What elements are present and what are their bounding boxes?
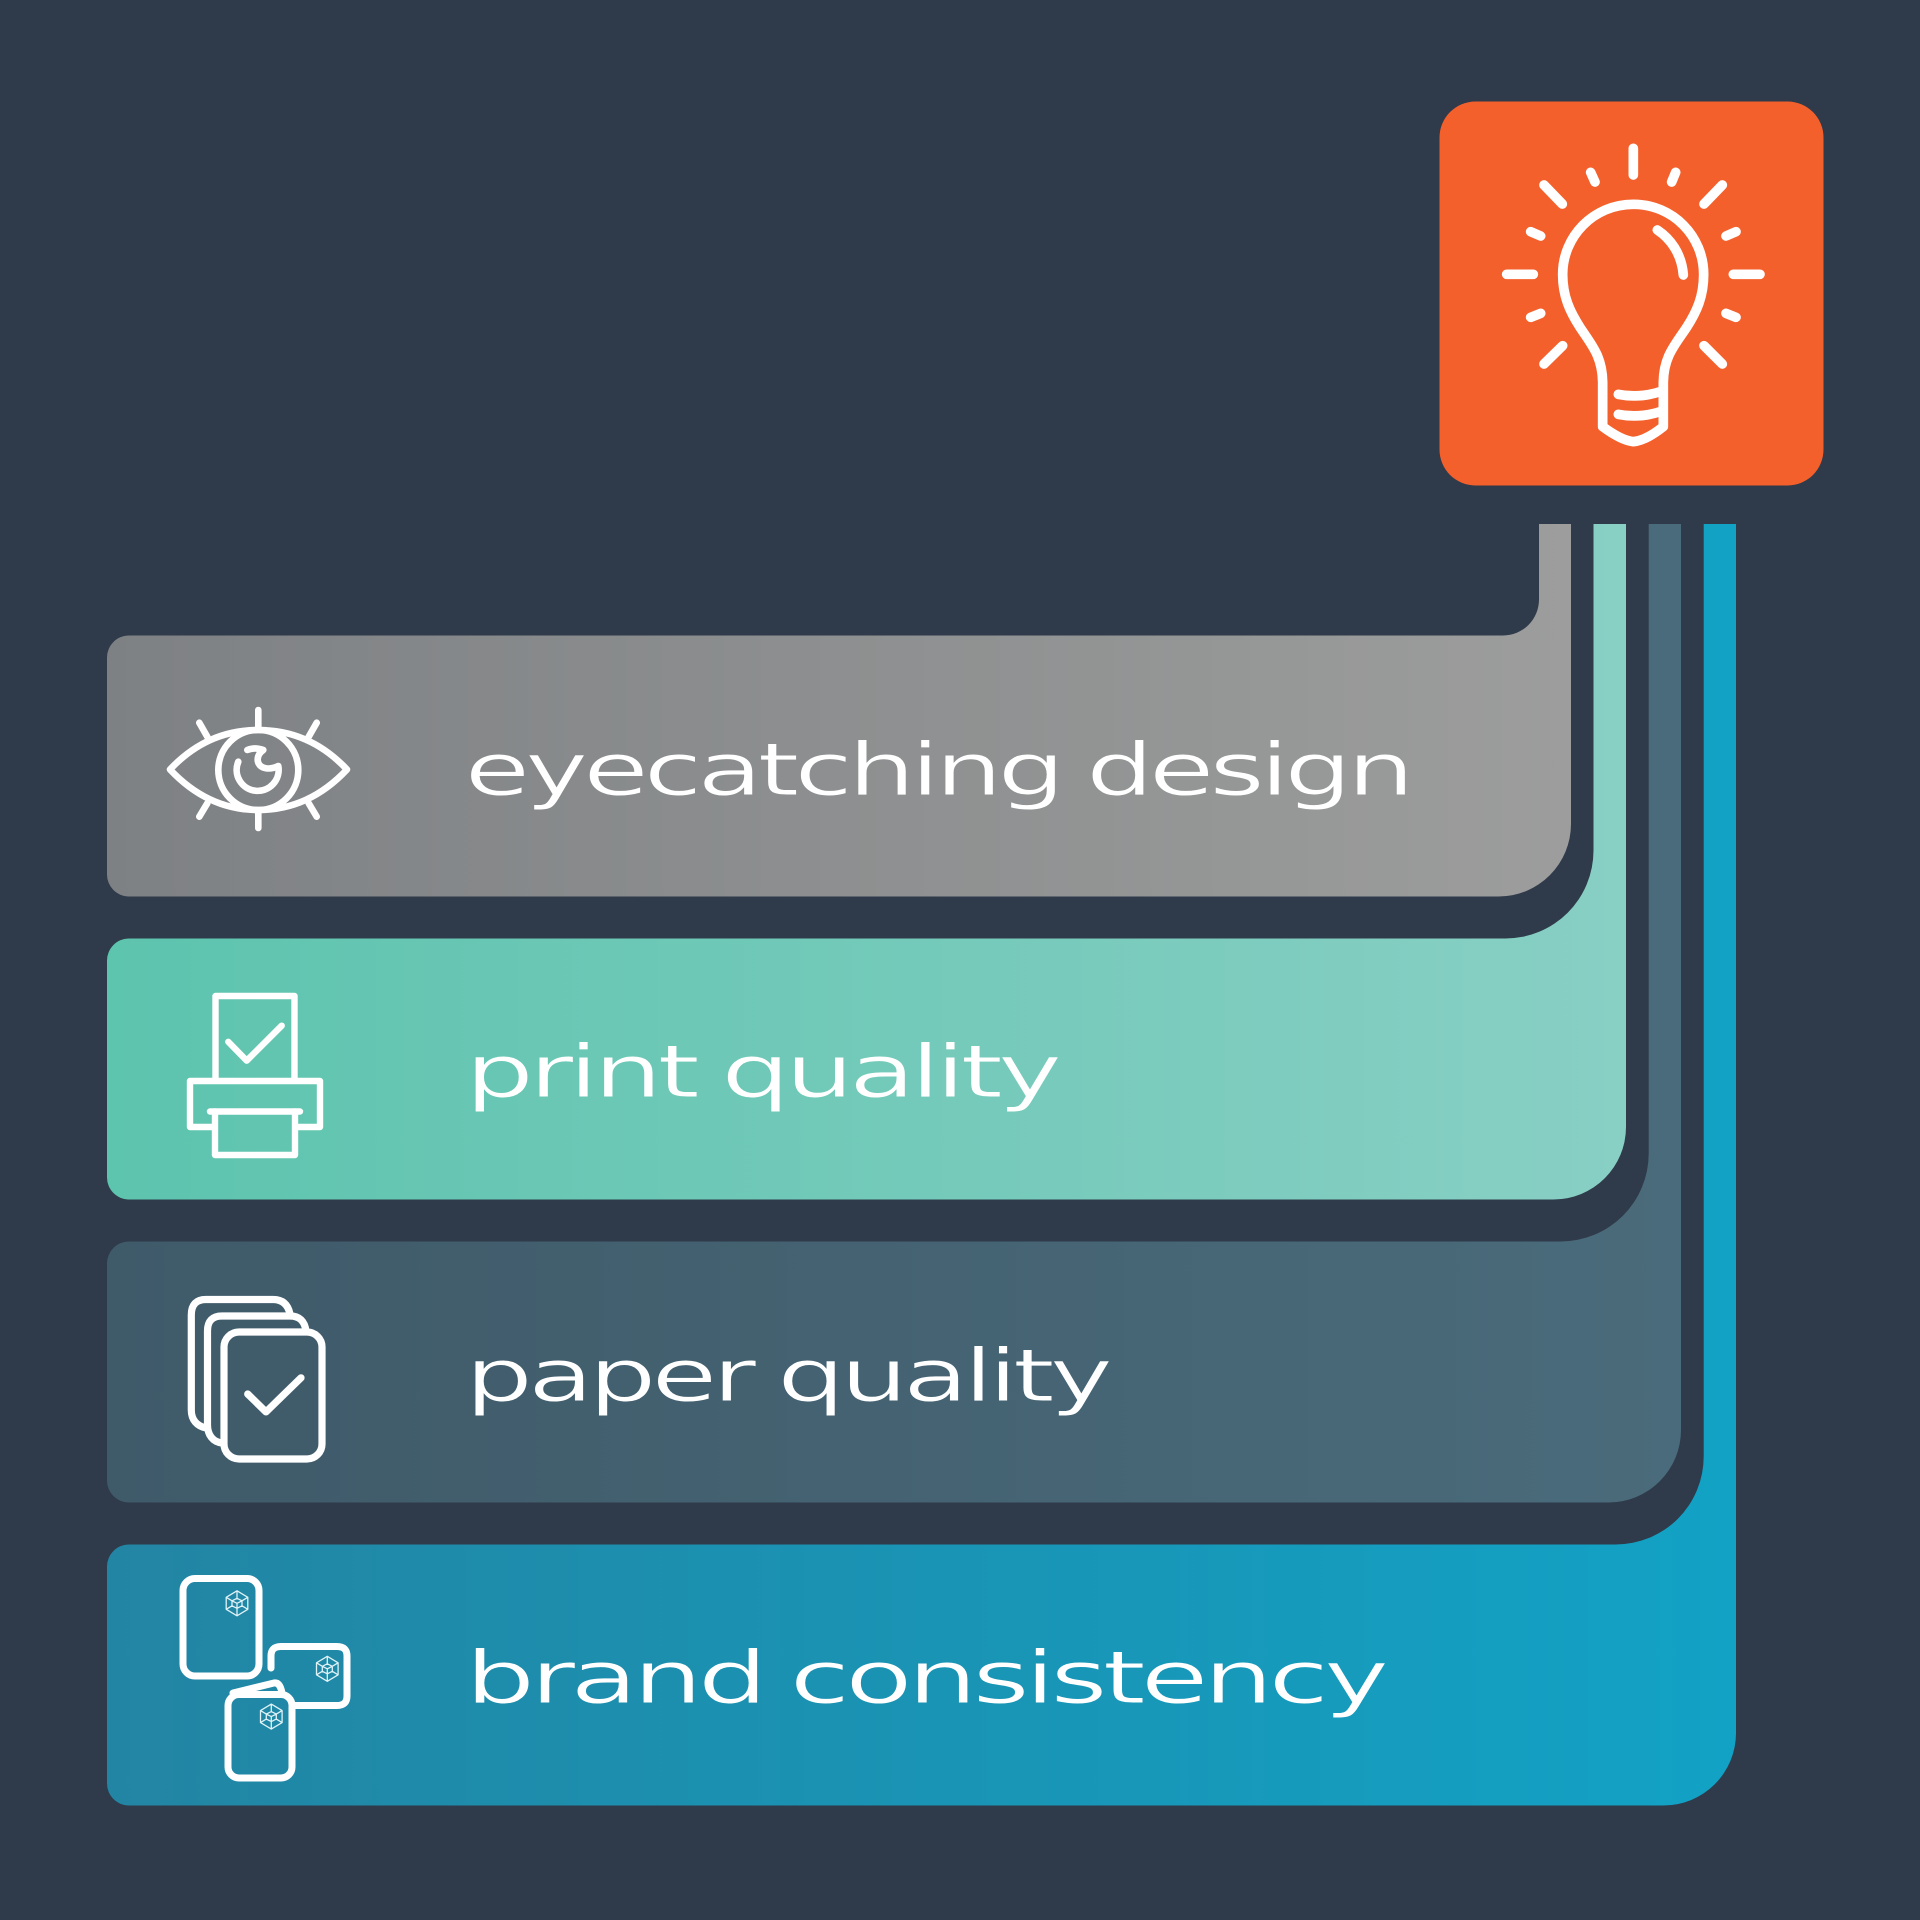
icon: orange lightbulb tile: [1440, 102, 1824, 486]
document outlines: [183, 1578, 347, 1778]
logo mark: document two: [316, 1656, 338, 1681]
panel: paper quality band: [107, 524, 1681, 1502]
heading: paper quality: paper quality: [465, 1334, 1111, 1419]
logo mark: document three: [260, 1704, 282, 1729]
heading: eyecatching design: eyecatching design: [464, 728, 1410, 813]
icon: eye: [170, 710, 347, 828]
icon: branded documents: [183, 1578, 347, 1778]
lightbulb glyph: [1507, 148, 1760, 442]
icon: paper stack with check: [191, 1300, 322, 1459]
panel: print quality band: [107, 524, 1626, 1200]
heading: print quality: print quality: [465, 1030, 1060, 1115]
panel: brand consistency band: [107, 524, 1736, 1806]
icon: printer with check: [190, 996, 320, 1155]
panel: eyecatching design band: [107, 524, 1571, 896]
heading: brand consistency: brand consistency: [465, 1636, 1387, 1721]
logo mark: document one: [226, 1591, 248, 1616]
orange rounded square: [1440, 102, 1824, 486]
